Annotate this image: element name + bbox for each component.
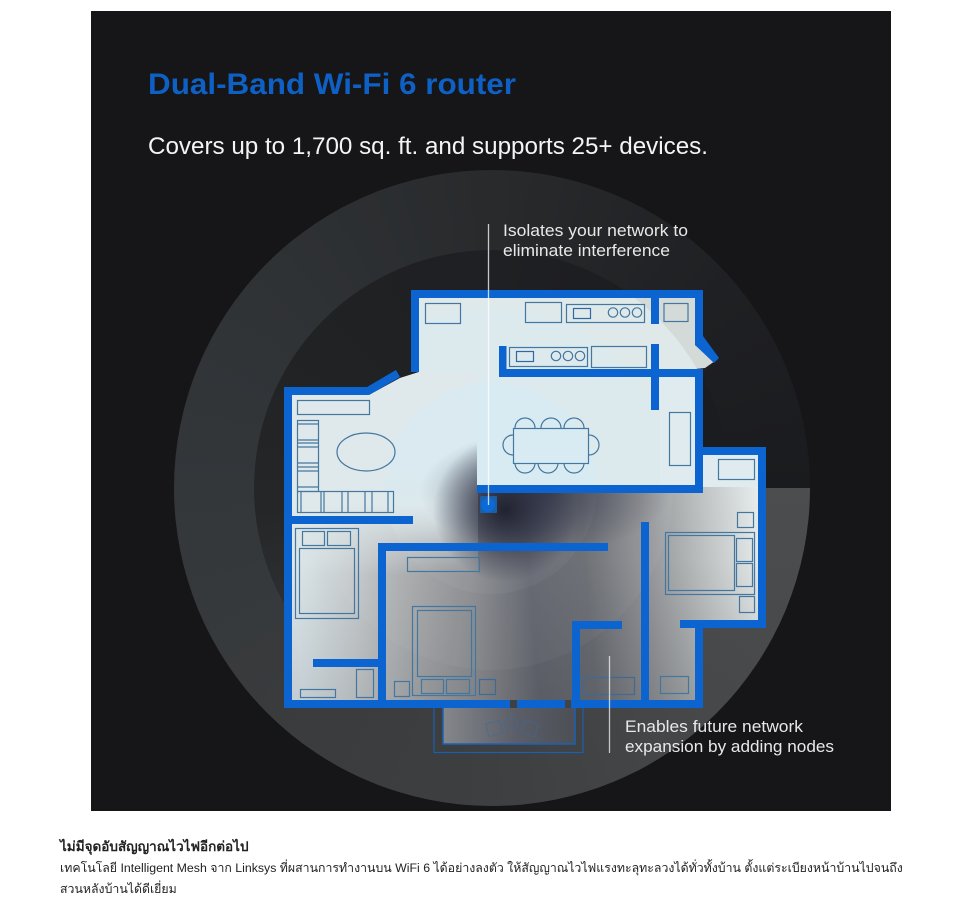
living room — [297, 400, 395, 512]
caption text block: สวนหลังบ้านได้ดีเยี่ยม — [60, 882, 177, 896]
floor plan artwork and labels — [149, 72, 834, 756]
right bedroom — [582, 460, 754, 694]
callout: future expansion: expansion by adding nodes — [625, 737, 834, 756]
left bedroom — [296, 528, 374, 698]
icon: router — [480, 496, 497, 513]
caption text block: เทคโนโลยี Intelligent Mesh จาก Linksys ที่ผสานการทำงานบน WiFi 6 ได้อย่างลงตัว ให้สัญญาณไวไฟแรงทะลุทะลวงได้ทั่วทั้งบ้าน ตั้งแต่ระเบียงหน้าบ้านไปจนถึง — [60, 860, 903, 874]
leader line: bottom callout — [608, 656, 610, 753]
callout: future expansion — [625, 717, 834, 756]
inner coverage ring — [254, 250, 730, 726]
walls — [284, 290, 766, 708]
floor fill — [292, 372, 758, 700]
callout: future expansion: Enables future network — [625, 717, 803, 736]
callout: isolates network: eliminate interference — [503, 241, 670, 260]
title: Dual-Band Wi-Fi 6 router — [148, 68, 516, 101]
outer coverage circle — [174, 170, 810, 806]
panel: dark router coverage graphic — [91, 11, 891, 811]
centre bedroom — [394, 558, 496, 696]
caption text block: ไม่มีจุดอับสัญญาณไวไฟอีกต่อไป — [60, 839, 249, 854]
furniture outlines — [296, 302, 754, 698]
leader line: top callout — [488, 224, 490, 505]
dining table — [503, 418, 599, 473]
balcony — [434, 708, 583, 752]
subtitle: Covers up to 1,700 sq. ft. and supports 25+ devices. — [148, 133, 708, 160]
upper rooms lit area — [419, 298, 750, 487]
callout: isolates network: Isolates your network to — [503, 221, 688, 240]
kitchen units — [426, 302, 688, 368]
caption text block — [58, 838, 903, 896]
sideboard — [670, 412, 690, 466]
callout: isolates network — [503, 221, 688, 260]
